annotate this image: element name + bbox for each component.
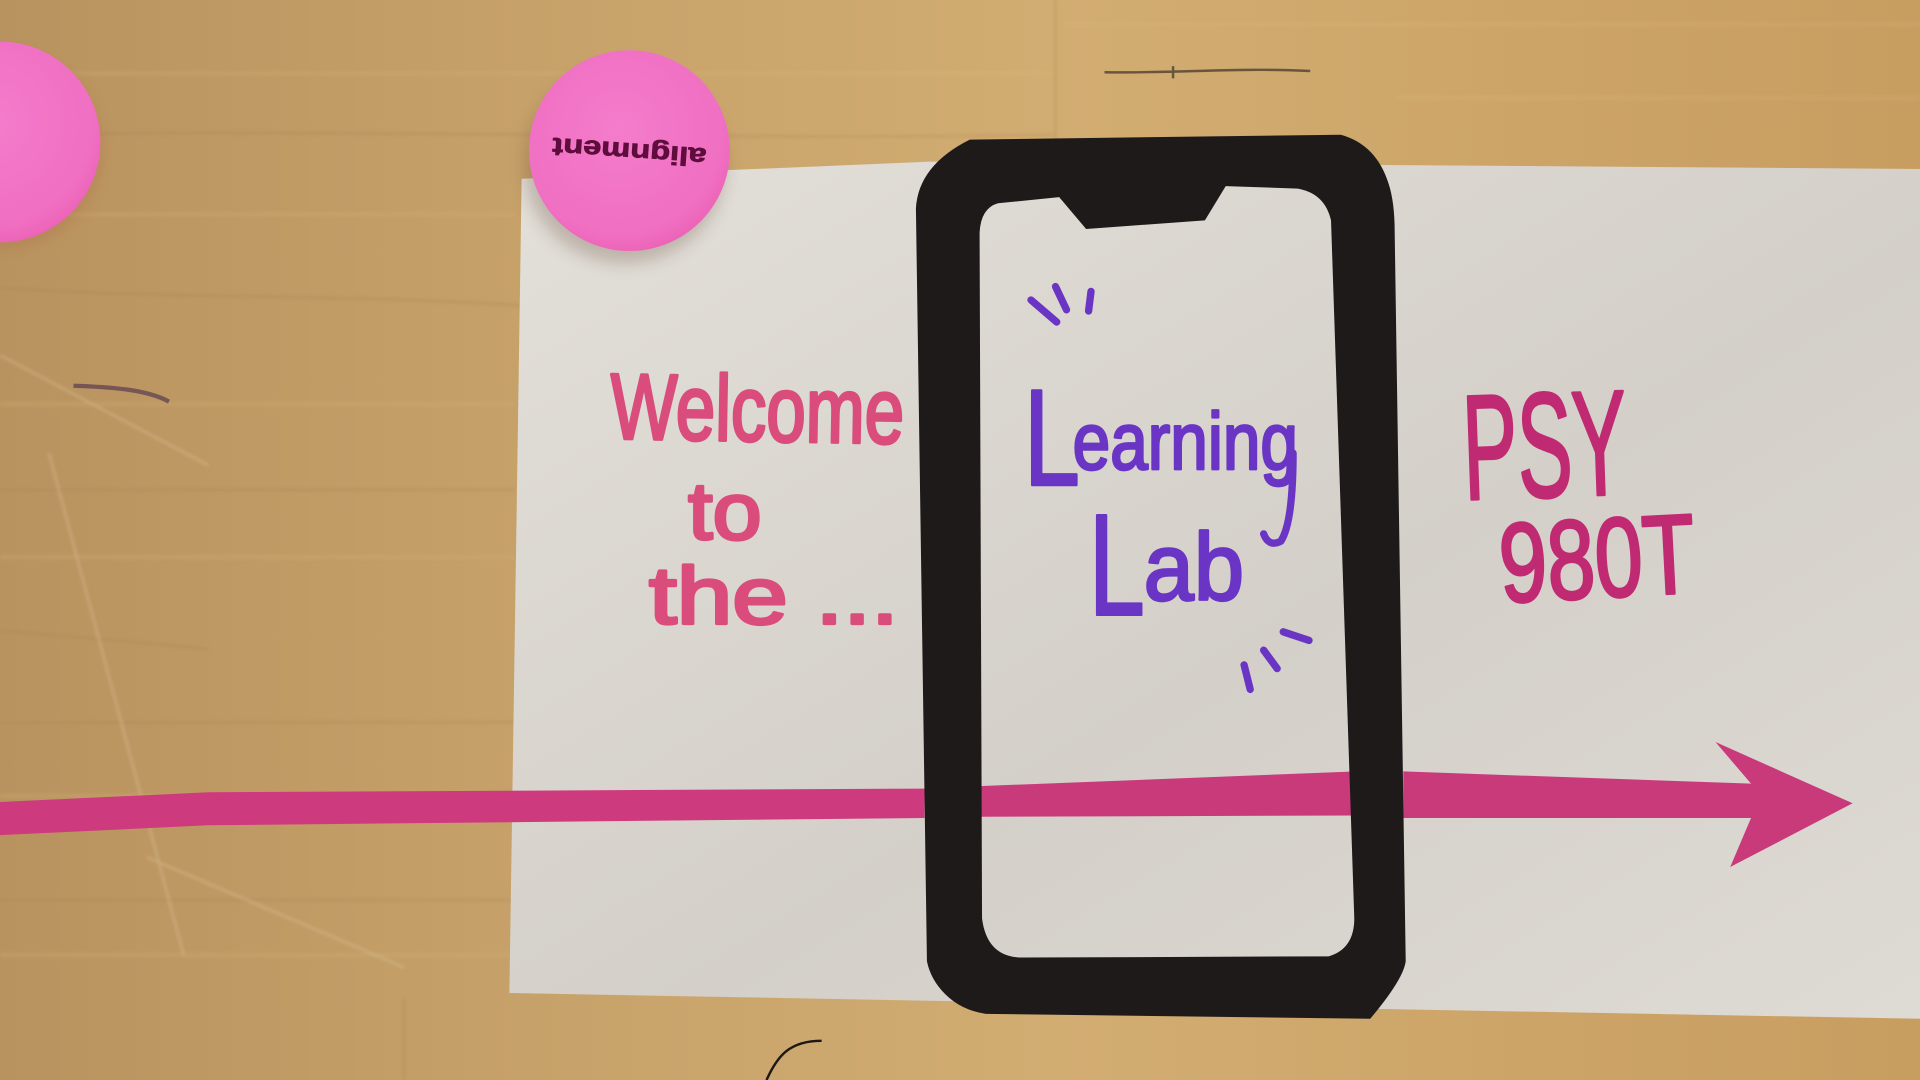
white paper sheet <box>509 162 1920 1019</box>
long pink paper arrow <box>0 742 1853 867</box>
heading: Learning Lab: earning <box>1073 397 1298 487</box>
pink button: partial, left edge <box>0 42 100 247</box>
y descender tail <box>1264 453 1293 543</box>
pink button: alignment <box>524 50 730 263</box>
heading: Learning Lab: L <box>1024 362 1080 515</box>
heading: Learning Lab: ab <box>1144 515 1244 621</box>
phone frame, black paper cutout <box>916 135 1406 1019</box>
heading: PSY 980T: PSY <box>1460 359 1630 532</box>
heading: Welcome to the <box>609 354 905 641</box>
heading: Welcome to the: the ... <box>649 551 899 641</box>
heading: PSY 980T: 980T <box>1496 490 1698 626</box>
heading: Welcome to the: to <box>688 467 762 557</box>
sparkle marks bottom <box>1244 632 1309 689</box>
heading: Welcome to the: Welcome <box>609 354 905 463</box>
sparkle marks top <box>1031 287 1091 322</box>
button label: alignment <box>551 132 707 171</box>
heading: PSY 980T <box>1460 359 1698 626</box>
heading: Learning Lab: L <box>1089 484 1145 646</box>
heading: Learning Lab <box>1024 362 1298 646</box>
